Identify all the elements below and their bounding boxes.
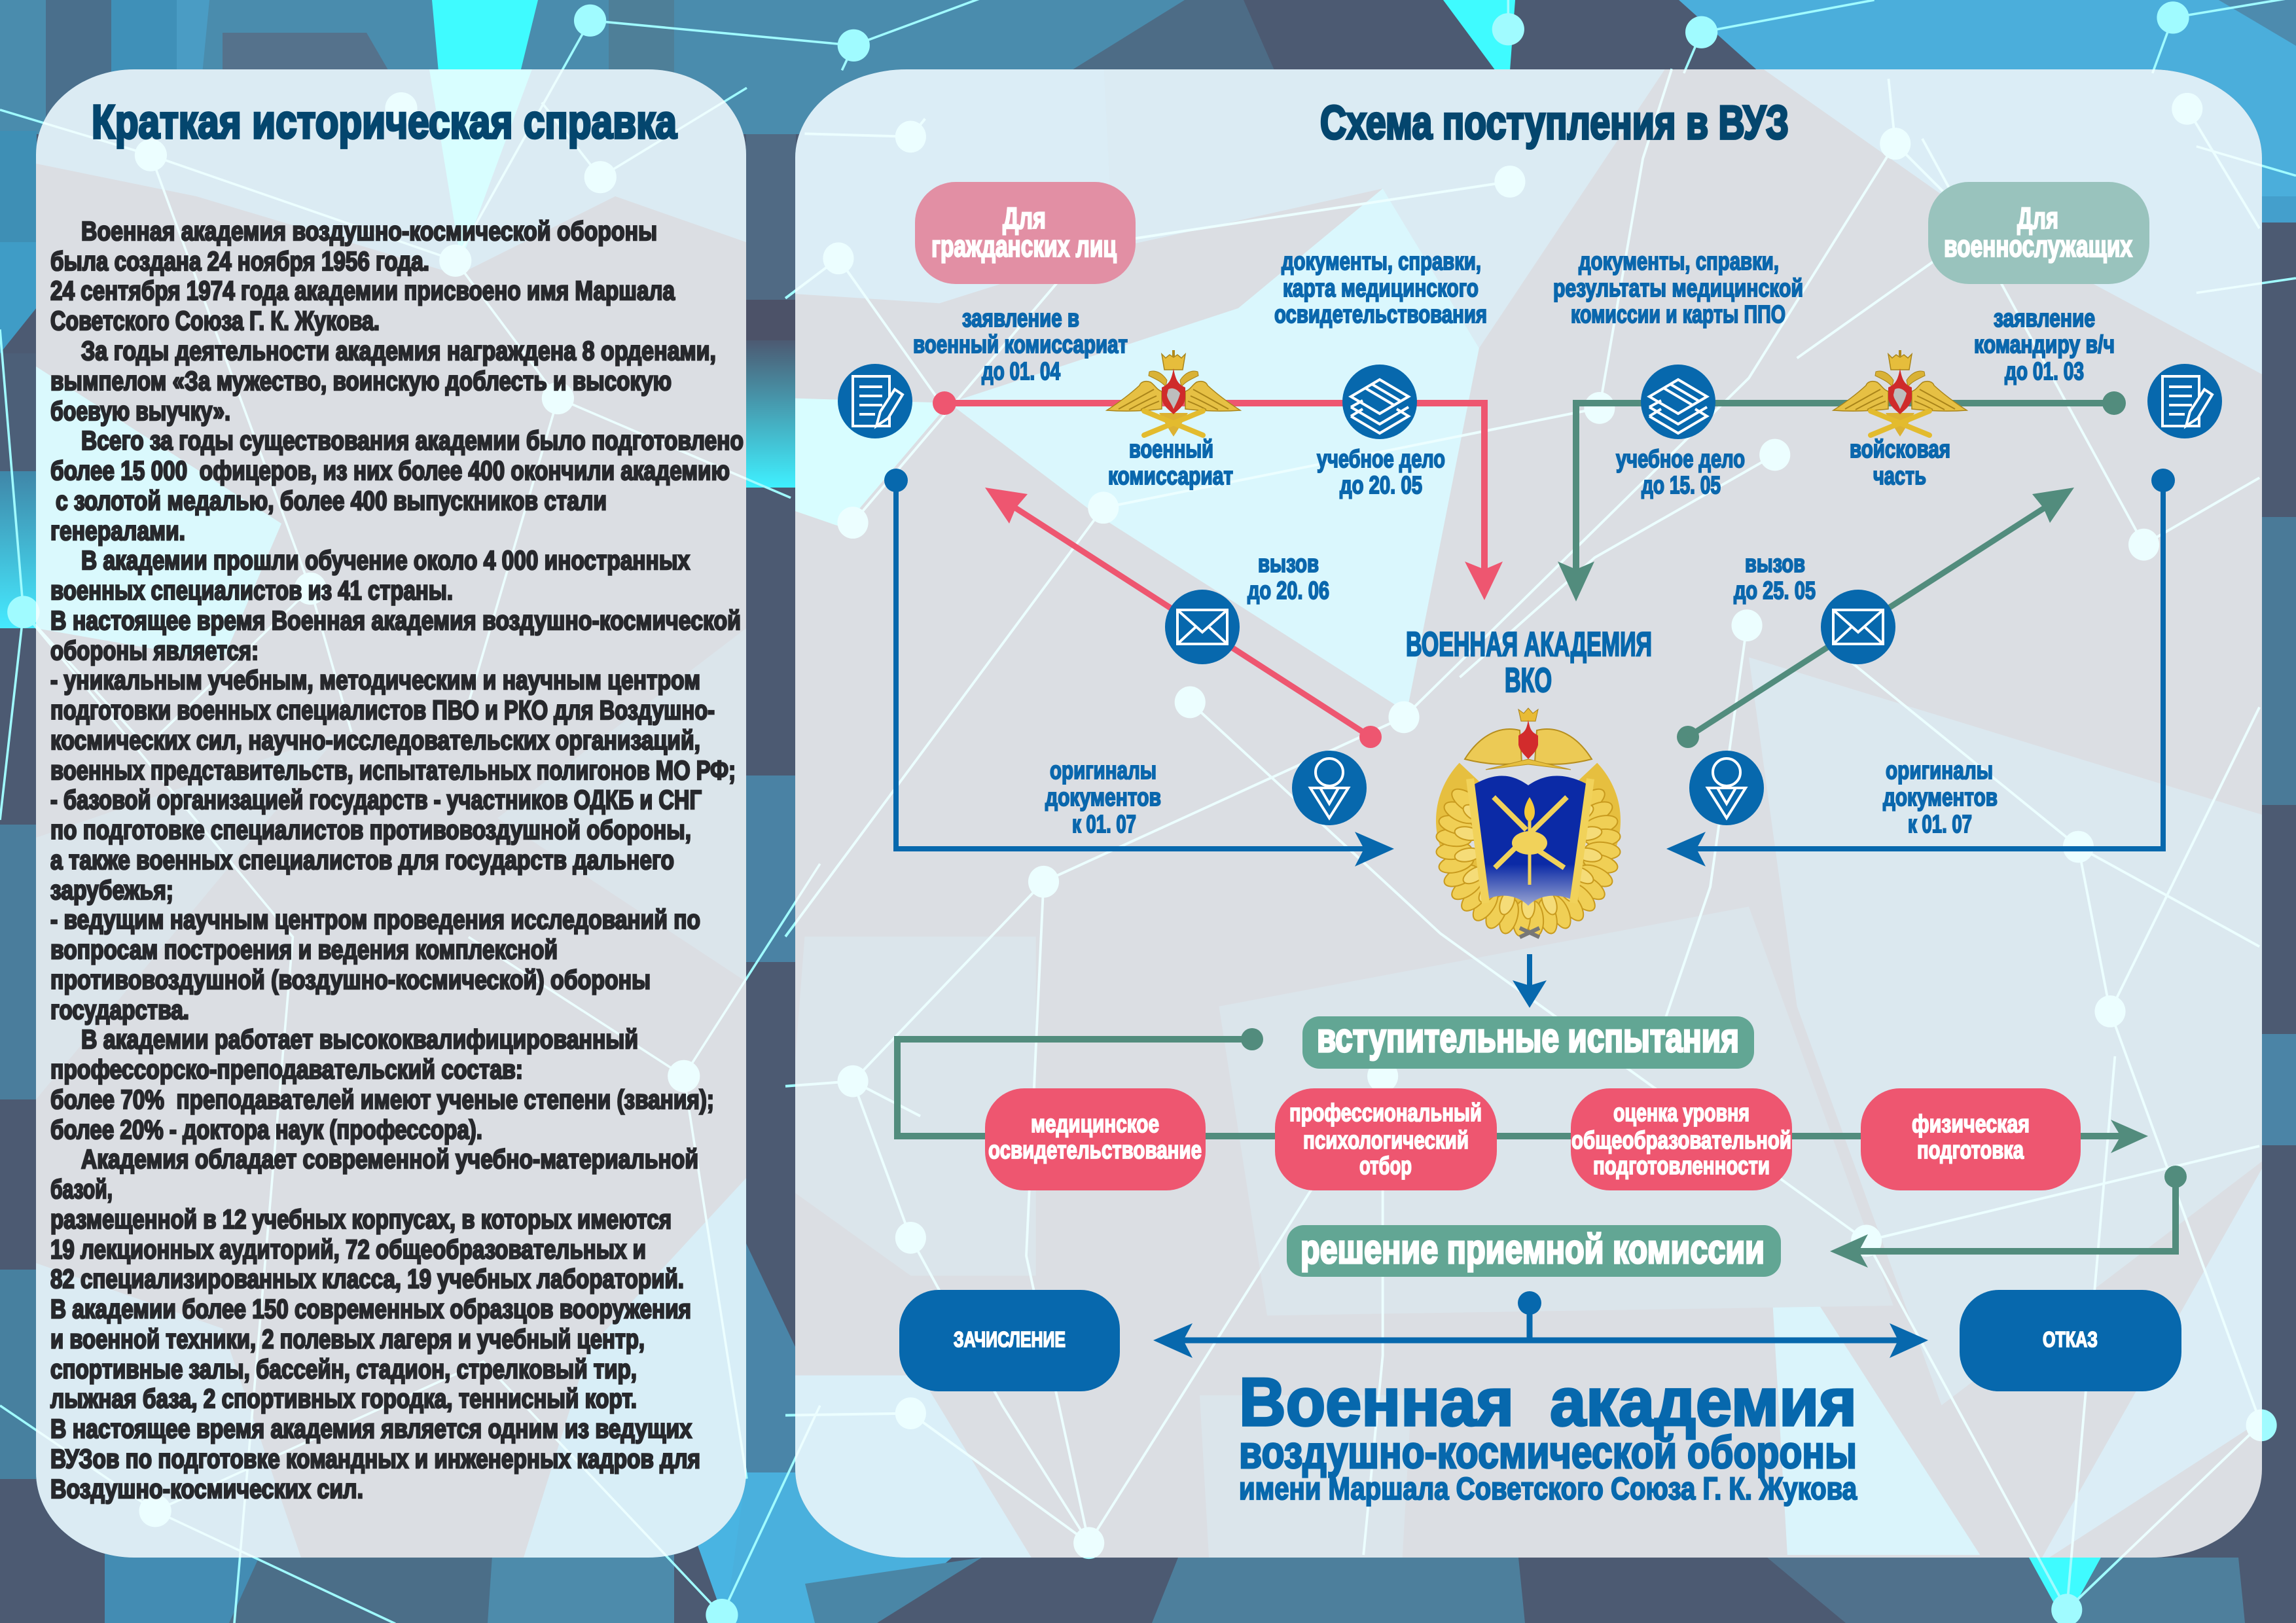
text block: history: военных представительств, испытательных полигонов МО РФ;: [50, 755, 736, 785]
exam box: psychological: психологический: [1303, 1127, 1469, 1154]
title: academy full name: [1239, 1364, 1857, 1507]
captions: serviceman route: документов: [1883, 784, 1998, 812]
text block: history: с золотой медалью, более 400 выпускников стали: [56, 486, 607, 516]
captions: serviceman route: часть: [1873, 463, 1926, 490]
captions: civilian route: [913, 248, 1487, 838]
label box: for servicemen: Для: [2017, 201, 2058, 235]
exam box: psychological: [1275, 1088, 1497, 1190]
captions: serviceman route: заявление: [1994, 305, 2095, 332]
captions: civilian route: документы, справки,: [1282, 248, 1481, 276]
text block: history: более 15 000 офицеров, из них более 400 окончили академию: [50, 455, 730, 486]
captions: civilian route: до 20. 06: [1247, 577, 1329, 605]
bottom band facets: [105, 1479, 327, 1623]
text block: history: была создана 24 ноября 1956 года.: [50, 246, 429, 276]
icon: military badge serviceman: [1689, 751, 1764, 825]
left panel underlay facets: [36, 65, 746, 1558]
text block: history: обороны является:: [50, 635, 259, 666]
captions: serviceman route: документы, справки,: [1579, 248, 1779, 276]
outcome box: rejection: [1960, 1290, 2181, 1391]
outcome box: enrolment: [899, 1290, 1120, 1391]
text block: history: вымпелом «За мужество, воинскую доблесть и высокую: [50, 366, 672, 396]
captions: civilian route: заявление в: [962, 305, 1079, 332]
icon: envelope serviceman: [1821, 590, 1895, 664]
icon: layers civilian: [1342, 365, 1417, 439]
captions: civilian route: к 01. 07: [1072, 811, 1136, 838]
arrow: call-up civilian: [985, 488, 1382, 748]
text block: history: зарубежья;: [50, 875, 173, 905]
exam box: medical: медицинское: [1031, 1111, 1159, 1138]
exam box: psychological: профессиональный: [1289, 1099, 1482, 1127]
exam box: medical: [985, 1088, 1206, 1190]
text block: history: и военной техники, 2 полевых лагеря и учебный центр,: [50, 1324, 645, 1354]
captions: serviceman route: результаты медицинской: [1553, 275, 1803, 302]
title: academy full name: имени Маршала Советского Союза Г. К. Жукова: [1239, 1472, 1857, 1507]
arrow: exams to commission decision: [1830, 1166, 2187, 1268]
text block: history: ВУЗов по подготовке командных и инженерных кадров для: [50, 1444, 700, 1474]
outcome box: enrolment: ЗАЧИСЛЕНИЕ: [954, 1327, 1066, 1351]
icon: application document civilian: [838, 364, 912, 438]
top band facets: [0, 0, 1198, 134]
exam box: medical: освидетельствование: [988, 1137, 1202, 1164]
captions: serviceman route: до 15. 05: [1641, 472, 1721, 499]
text block: history: 82 специализированных класса, 19 учебных лабораторий.: [50, 1264, 684, 1294]
heading: history: Краткая историческая справка: [92, 96, 677, 149]
heading: academy: ВОЕННАЯ АКАДЕМИЯ: [1406, 626, 1652, 664]
exam box: physical: [1861, 1088, 2081, 1190]
captions: civilian route: до 20. 05: [1340, 472, 1422, 499]
text block: history: генералами.: [50, 516, 185, 546]
text block: history: - базовой организацией государств - участников ОДКБ и СНГ: [50, 785, 702, 815]
right panel underlay facets: [785, 59, 2269, 1565]
panel: history background: [36, 69, 746, 1558]
text block: history: Советского Союза Г. К. Жукова.: [50, 306, 380, 336]
captions: serviceman route: вызов: [1745, 550, 1805, 578]
label box: for civilians: Для: [1003, 201, 1046, 235]
text block: history: лыжная база, 2 спортивных городка, теннисный корт.: [50, 1383, 637, 1414]
text block: history: базой,: [50, 1174, 113, 1204]
text block: history: размещенной в 12 учебных корпусах, в которых имеются: [50, 1204, 672, 1234]
text block: history: спортивные залы, бассейн, стадион, стрелковый тир,: [50, 1354, 637, 1384]
captions: serviceman route: командиру в/ч: [1974, 331, 2115, 359]
exam box: education level: оценка уровня: [1613, 1099, 1749, 1127]
icon: layers serviceman: [1641, 365, 1715, 439]
captions: civilian route: военный: [1129, 436, 1213, 463]
arrow: call-up serviceman: [1677, 488, 2074, 748]
label: commission decision: решение приемной комиссии: [1300, 1227, 1765, 1272]
text block: history: Военная академия воздушно-космической обороны: [81, 216, 657, 246]
captions: civilian route: военный комиссариат: [913, 331, 1128, 359]
text block: history: В настоящее время Военная академия воздушно-космической: [50, 605, 741, 635]
captions: serviceman route: учебное дело: [1616, 446, 1745, 473]
text block: history: по подготовке специалистов противовоздушной обороны,: [50, 815, 691, 845]
exam box: physical: физическая: [1912, 1111, 2030, 1138]
text block: history: более 70% преподавателей имеют ученые степени (звания);: [50, 1084, 714, 1115]
captions: civilian route: комиссариат: [1108, 463, 1233, 490]
captions: civilian route: оригиналы: [1050, 757, 1157, 785]
emblem: academy coat of arms: [1435, 708, 1621, 937]
arrow: academy to entrance exams: [1513, 954, 1547, 1008]
gap between panels: [746, 134, 796, 300]
exam box: education level: [1571, 1088, 1792, 1190]
exam box: physical: подготовка: [1917, 1137, 2024, 1164]
exam box: psychological: отбор: [1359, 1152, 1412, 1180]
captions: serviceman route: до 25. 05: [1734, 577, 1816, 605]
icon: eagle emblem civilian: [1107, 350, 1240, 437]
label box: for civilians: гражданских лиц: [931, 229, 1117, 263]
text block: history: В академии работает высококвалифицированный: [81, 1024, 638, 1054]
icon: military badge civilian: [1292, 751, 1367, 825]
text block: history: 19 лекционных аудиторий, 72 общеобразовательных и: [50, 1234, 646, 1264]
captions: serviceman route: к 01. 07: [1908, 811, 1972, 838]
captions: civilian route: вызов: [1258, 550, 1319, 578]
panel: admission scheme background: [795, 69, 2262, 1558]
text block: history: боевую выучку».: [50, 396, 230, 426]
captions: civilian route: учебное дело: [1317, 446, 1445, 473]
text block: history: государства.: [50, 995, 189, 1025]
captions: serviceman route: войсковая: [1850, 436, 1950, 463]
arrow: exam sequence: [897, 1028, 2148, 1153]
arrow: originals serviceman: [1666, 469, 2175, 866]
arrow: civilian route to academy: [933, 391, 1503, 600]
text block: history: - ведущим научным центром проведения исследований по: [50, 904, 700, 935]
label box: for civilians: [915, 182, 1136, 284]
heading: academy: ВКО: [1505, 662, 1552, 700]
captions: civilian route: документов: [1045, 784, 1161, 812]
text block: history: военных специалистов из 41 страны.: [50, 575, 453, 605]
icon: envelope civilian: [1165, 590, 1240, 664]
exam box: education level: подготовленности: [1593, 1152, 1770, 1180]
text block: history: космических сил, научно-исследовательских организаций,: [50, 725, 700, 755]
arrow: serviceman route to academy: [1558, 391, 2126, 601]
text block: history: а также военных специалистов для государств дальнего: [50, 845, 674, 875]
label box: for servicemen: военнослужащих: [1944, 229, 2132, 263]
text block: history: [50, 216, 744, 1504]
label box: for servicemen: [1928, 182, 2149, 284]
text block: history: профессорско-преподавательский состав:: [50, 1054, 523, 1084]
captions: civilian route: освидетельствования: [1274, 301, 1487, 329]
text block: history: В академии более 150 современных образцов вооружения: [50, 1294, 691, 1324]
icon: eagle emblem serviceman: [1833, 350, 1967, 437]
text block: history: подготовки военных специалистов ПВО и РКО для Воздушно-: [50, 695, 715, 725]
captions: civilian route: до 01. 04: [982, 358, 1060, 385]
text block: history: Всего за годы существования академии было подготовлено: [81, 425, 744, 455]
arrow: decision outcomes: [1153, 1291, 1928, 1358]
exam box: education level: общеобразовательной: [1571, 1127, 1791, 1154]
right margin facets: [2262, 196, 2296, 223]
text block: history: вопросам построения и ведения комплексной: [50, 935, 558, 965]
captions: serviceman route: оригиналы: [1886, 757, 1993, 785]
text block: history: Воздушно-космических сил.: [50, 1474, 363, 1504]
arrow: originals civilian: [884, 469, 1394, 866]
text block: history: В настоящее время академия является одним из ведущих: [50, 1414, 692, 1444]
icon: application document serviceman: [2147, 364, 2222, 438]
text block: history: более 20% - доктора наук (профессора).: [50, 1115, 482, 1145]
captions: civilian route: карта медицинского: [1283, 275, 1479, 302]
title: academy full name: воздушно-космической обороны: [1239, 1427, 1857, 1478]
left margin facets: [0, 131, 37, 242]
text block: history: 24 сентября 1974 года академии присвоено имя Маршала: [50, 276, 675, 306]
text block: history: В академии прошли обучение около 4 000 иностранных: [81, 545, 690, 575]
captions: serviceman route: комиссии и карты ППО: [1571, 301, 1785, 329]
label: entrance exams: вступительные испытания: [1317, 1016, 1739, 1061]
text block: history: противовоздушной (воздушно-космической) обороны: [50, 965, 651, 995]
captions: serviceman route: [1553, 248, 2115, 838]
captions: serviceman route: до 01. 03: [2005, 358, 2084, 385]
heading: academy: [1406, 626, 1652, 700]
outcome box: rejection: ОТКАЗ: [2043, 1327, 2098, 1351]
text block: history: - уникальным учебным, методическим и научным центром: [50, 665, 700, 695]
title: academy full name: Военная академия: [1239, 1364, 1857, 1440]
text block: history: За годы деятельности академия награждена 8 орденами,: [81, 336, 716, 366]
text block: history: Академия обладает современной учебно-материальной: [81, 1144, 698, 1174]
heading: admission scheme: Схема поступления в ВУЗ: [1320, 97, 1789, 149]
label: entrance exams: [1302, 1016, 1754, 1069]
